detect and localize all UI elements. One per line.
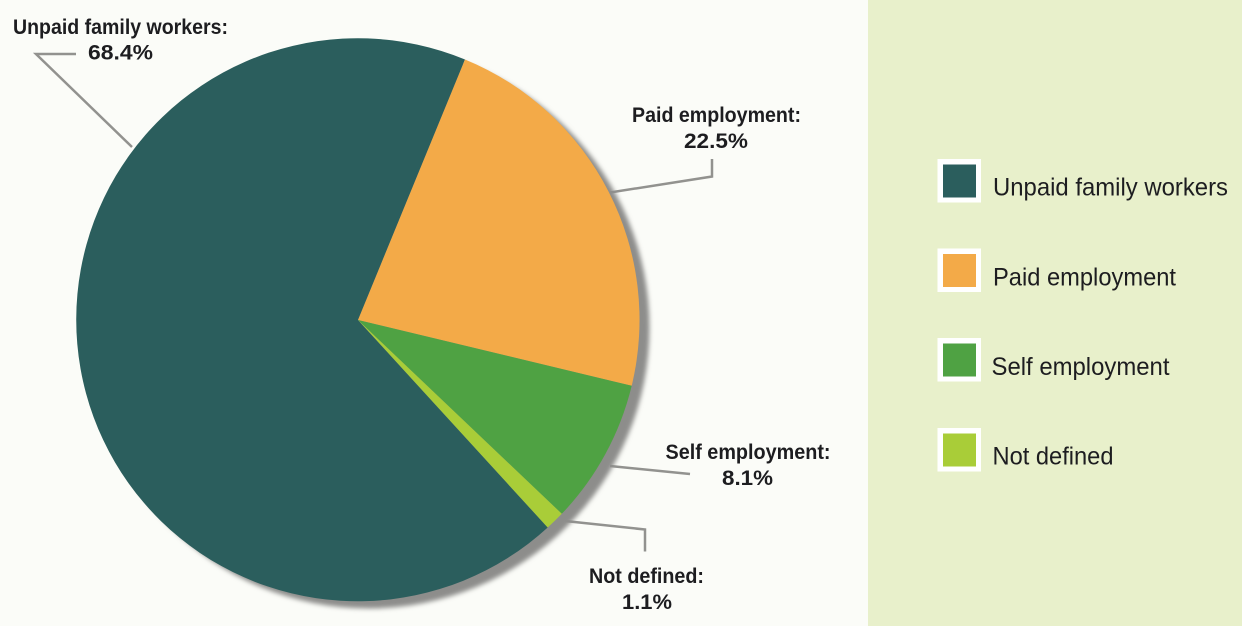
slice: unpaid family workers 68.4% — [76, 38, 548, 601]
legend item: not defined — [938, 428, 1114, 472]
pie chart — [76, 38, 640, 601]
slice: paid employment 22.5% — [358, 60, 640, 386]
legend item: paid employment: Paid employment — [993, 264, 1176, 292]
label: self employment: 8.1% — [722, 466, 773, 490]
legend item: unpaid family workers — [938, 159, 1228, 202]
label: unpaid family workers: Unpaid family workers: — [13, 15, 228, 39]
legend item: unpaid family workers: Unpaid family workers — [993, 174, 1228, 202]
label: self employment — [666, 440, 830, 490]
leader line: self employment — [610, 466, 690, 474]
label: not defined: 1.1% — [622, 590, 672, 614]
label: unpaid family workers: 68.4% — [88, 40, 153, 64]
label: paid employment — [632, 103, 801, 153]
label: unpaid family workers — [13, 15, 228, 64]
label: not defined — [589, 564, 704, 614]
pie shadow — [88, 46, 650, 608]
legend — [938, 159, 1228, 472]
legend item: not defined: Not defined — [992, 442, 1114, 470]
leader line: paid employment — [610, 159, 712, 192]
background — [0, 0, 868, 626]
leader line: unpaid family workers — [36, 54, 132, 147]
slice: self employment 8.1% — [358, 320, 632, 514]
leader line: not defined — [565, 521, 645, 552]
label: paid employment: Paid employment: — [632, 103, 801, 127]
legend item: paid employment — [938, 248, 1176, 292]
legend panel background — [868, 0, 1242, 626]
label: not defined: Not defined: — [589, 564, 704, 588]
legend item: self employment — [938, 338, 1170, 382]
slice: not defined 1.1% — [358, 320, 562, 528]
legend item: self employment: Self employment — [992, 353, 1170, 381]
label: self employment: Self employment: — [666, 440, 830, 464]
label: paid employment: 22.5% — [684, 129, 748, 153]
